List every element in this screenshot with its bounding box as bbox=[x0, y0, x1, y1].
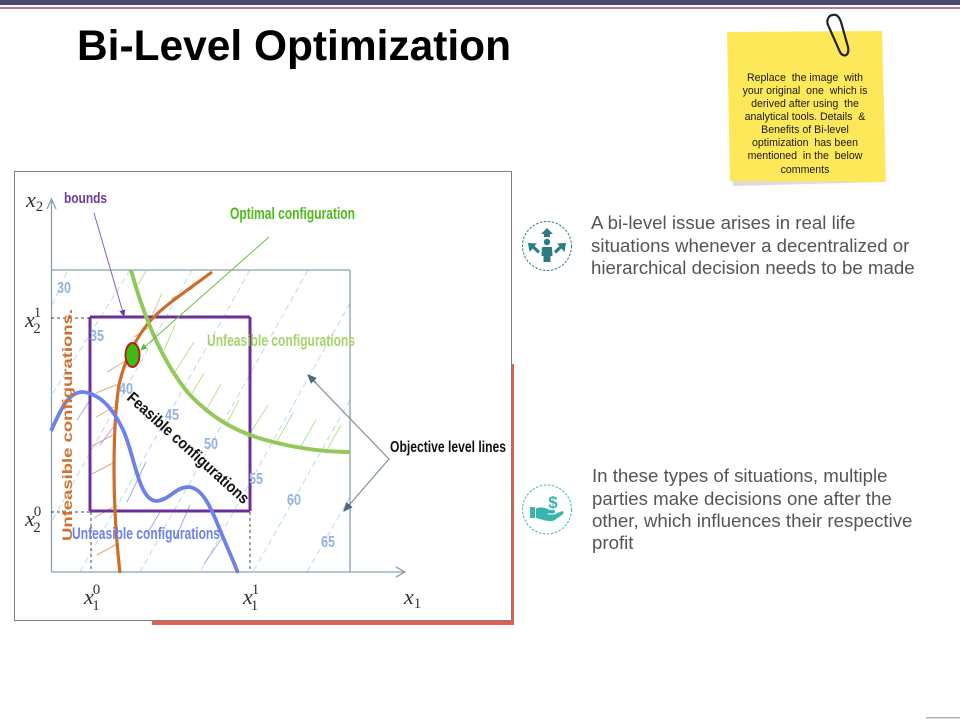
optimal point marker bbox=[126, 343, 140, 367]
text block: bi-level issue: A bi-level issue arises in real life bbox=[591, 212, 855, 233]
sticky note text: Replace the image with bbox=[747, 72, 863, 84]
axis labels: x bbox=[84, 584, 94, 609]
hatching: orange constraint bbox=[92, 288, 193, 555]
icon: hand holding dollar: $ bbox=[548, 493, 558, 512]
objective level lines bbox=[52, 270, 350, 572]
axis labels: x bbox=[404, 584, 414, 609]
icon: hand holding dollar bbox=[522, 485, 572, 534]
axis labels: 1 bbox=[34, 305, 41, 321]
axis labels: 1 bbox=[252, 582, 259, 598]
text block: multiple parties: profit bbox=[592, 532, 634, 553]
axis labels: 1 bbox=[92, 598, 100, 614]
panel: bi-level optimization chart bbox=[14, 172, 512, 620]
icon: person with three arrows bbox=[522, 222, 572, 270]
green curve bbox=[131, 270, 350, 452]
sticky note text: Benefits of Bi-level bbox=[761, 124, 849, 136]
sticky note text: analytical tools. Details & bbox=[745, 111, 865, 123]
footer line bbox=[926, 717, 960, 718]
sticky note text: your original one which is bbox=[743, 85, 867, 97]
axis labels bbox=[24, 187, 421, 614]
red offset frame bbox=[152, 364, 514, 625]
objective level lines label and arrows: Objective level lines bbox=[390, 439, 506, 456]
text block: multiple parties: other, which influences their respective bbox=[592, 510, 912, 531]
objective value numbers bbox=[57, 280, 335, 551]
unfeasible configurations labels: Unfeasible configurations bbox=[72, 524, 220, 543]
sticky note text bbox=[743, 72, 867, 176]
objective level lines label and arrows bbox=[308, 375, 506, 511]
objective value numbers: 35 bbox=[90, 328, 104, 345]
orange curve bbox=[114, 272, 212, 573]
sticky note text: optimization has been bbox=[752, 137, 858, 149]
axis labels: x bbox=[243, 584, 253, 609]
bounds label and arrow: bounds bbox=[64, 190, 107, 207]
axis labels: 2 bbox=[36, 199, 43, 215]
text block: bi-level issue: situations whenever a decentralized or bbox=[591, 235, 909, 256]
objective value numbers: 45 bbox=[165, 407, 179, 424]
sticky note text: derived after using the bbox=[751, 98, 859, 110]
axis labels: x bbox=[25, 307, 35, 332]
text block: multiple parties: parties make decisions one after the bbox=[592, 488, 892, 509]
bounds label and arrow bbox=[64, 190, 124, 316]
unfeasible configurations labels: Unfeasible configurations bbox=[207, 331, 355, 350]
text block: multiple parties: In these types of situations, multiple bbox=[592, 465, 888, 486]
top header bars bbox=[0, 0, 960, 9]
sticky note text: comments bbox=[781, 164, 829, 176]
objective value numbers: 30 bbox=[57, 280, 71, 297]
sticky note text: mentioned in the below bbox=[748, 150, 863, 162]
title: Bi-Level Optimization bbox=[77, 23, 511, 70]
hatching: blue constraint bbox=[77, 400, 222, 564]
axis labels: 1 bbox=[414, 596, 421, 612]
text block: bi-level issue bbox=[591, 212, 915, 278]
axis labels: 0 bbox=[93, 582, 100, 598]
sticky note bbox=[727, 15, 886, 186]
text block: multiple parties bbox=[592, 465, 912, 553]
icon: paperclip bbox=[827, 15, 848, 55]
purple bounds box bbox=[51, 317, 250, 572]
objective value numbers: 40 bbox=[119, 381, 133, 398]
text block: bi-level issue: hierarchical decision needs to be made bbox=[591, 257, 915, 278]
objective value numbers: 50 bbox=[204, 436, 218, 453]
axis labels: 0 bbox=[34, 504, 41, 520]
feasible configurations label: Feasible configurations bbox=[123, 389, 252, 508]
axis labels: x bbox=[26, 187, 36, 212]
axis labels: x bbox=[25, 506, 35, 531]
axis labels: 2 bbox=[33, 321, 41, 337]
blue curve bbox=[51, 392, 238, 573]
objective value numbers: 65 bbox=[321, 534, 335, 551]
optimal configuration label and arrow bbox=[141, 205, 355, 350]
unfeasible configurations labels bbox=[59, 309, 355, 543]
objective value numbers: 55 bbox=[249, 471, 263, 488]
objective value numbers: 60 bbox=[287, 492, 301, 509]
optimal configuration label and arrow: Optimal configuration bbox=[230, 205, 355, 223]
hatching: green constraint bbox=[137, 270, 341, 450]
unfeasible configurations labels: Unfeasible configurations. bbox=[59, 309, 75, 541]
axes and outer domain bbox=[47, 199, 405, 577]
axis labels: 1 bbox=[251, 598, 258, 614]
axis labels: 2 bbox=[33, 520, 41, 536]
